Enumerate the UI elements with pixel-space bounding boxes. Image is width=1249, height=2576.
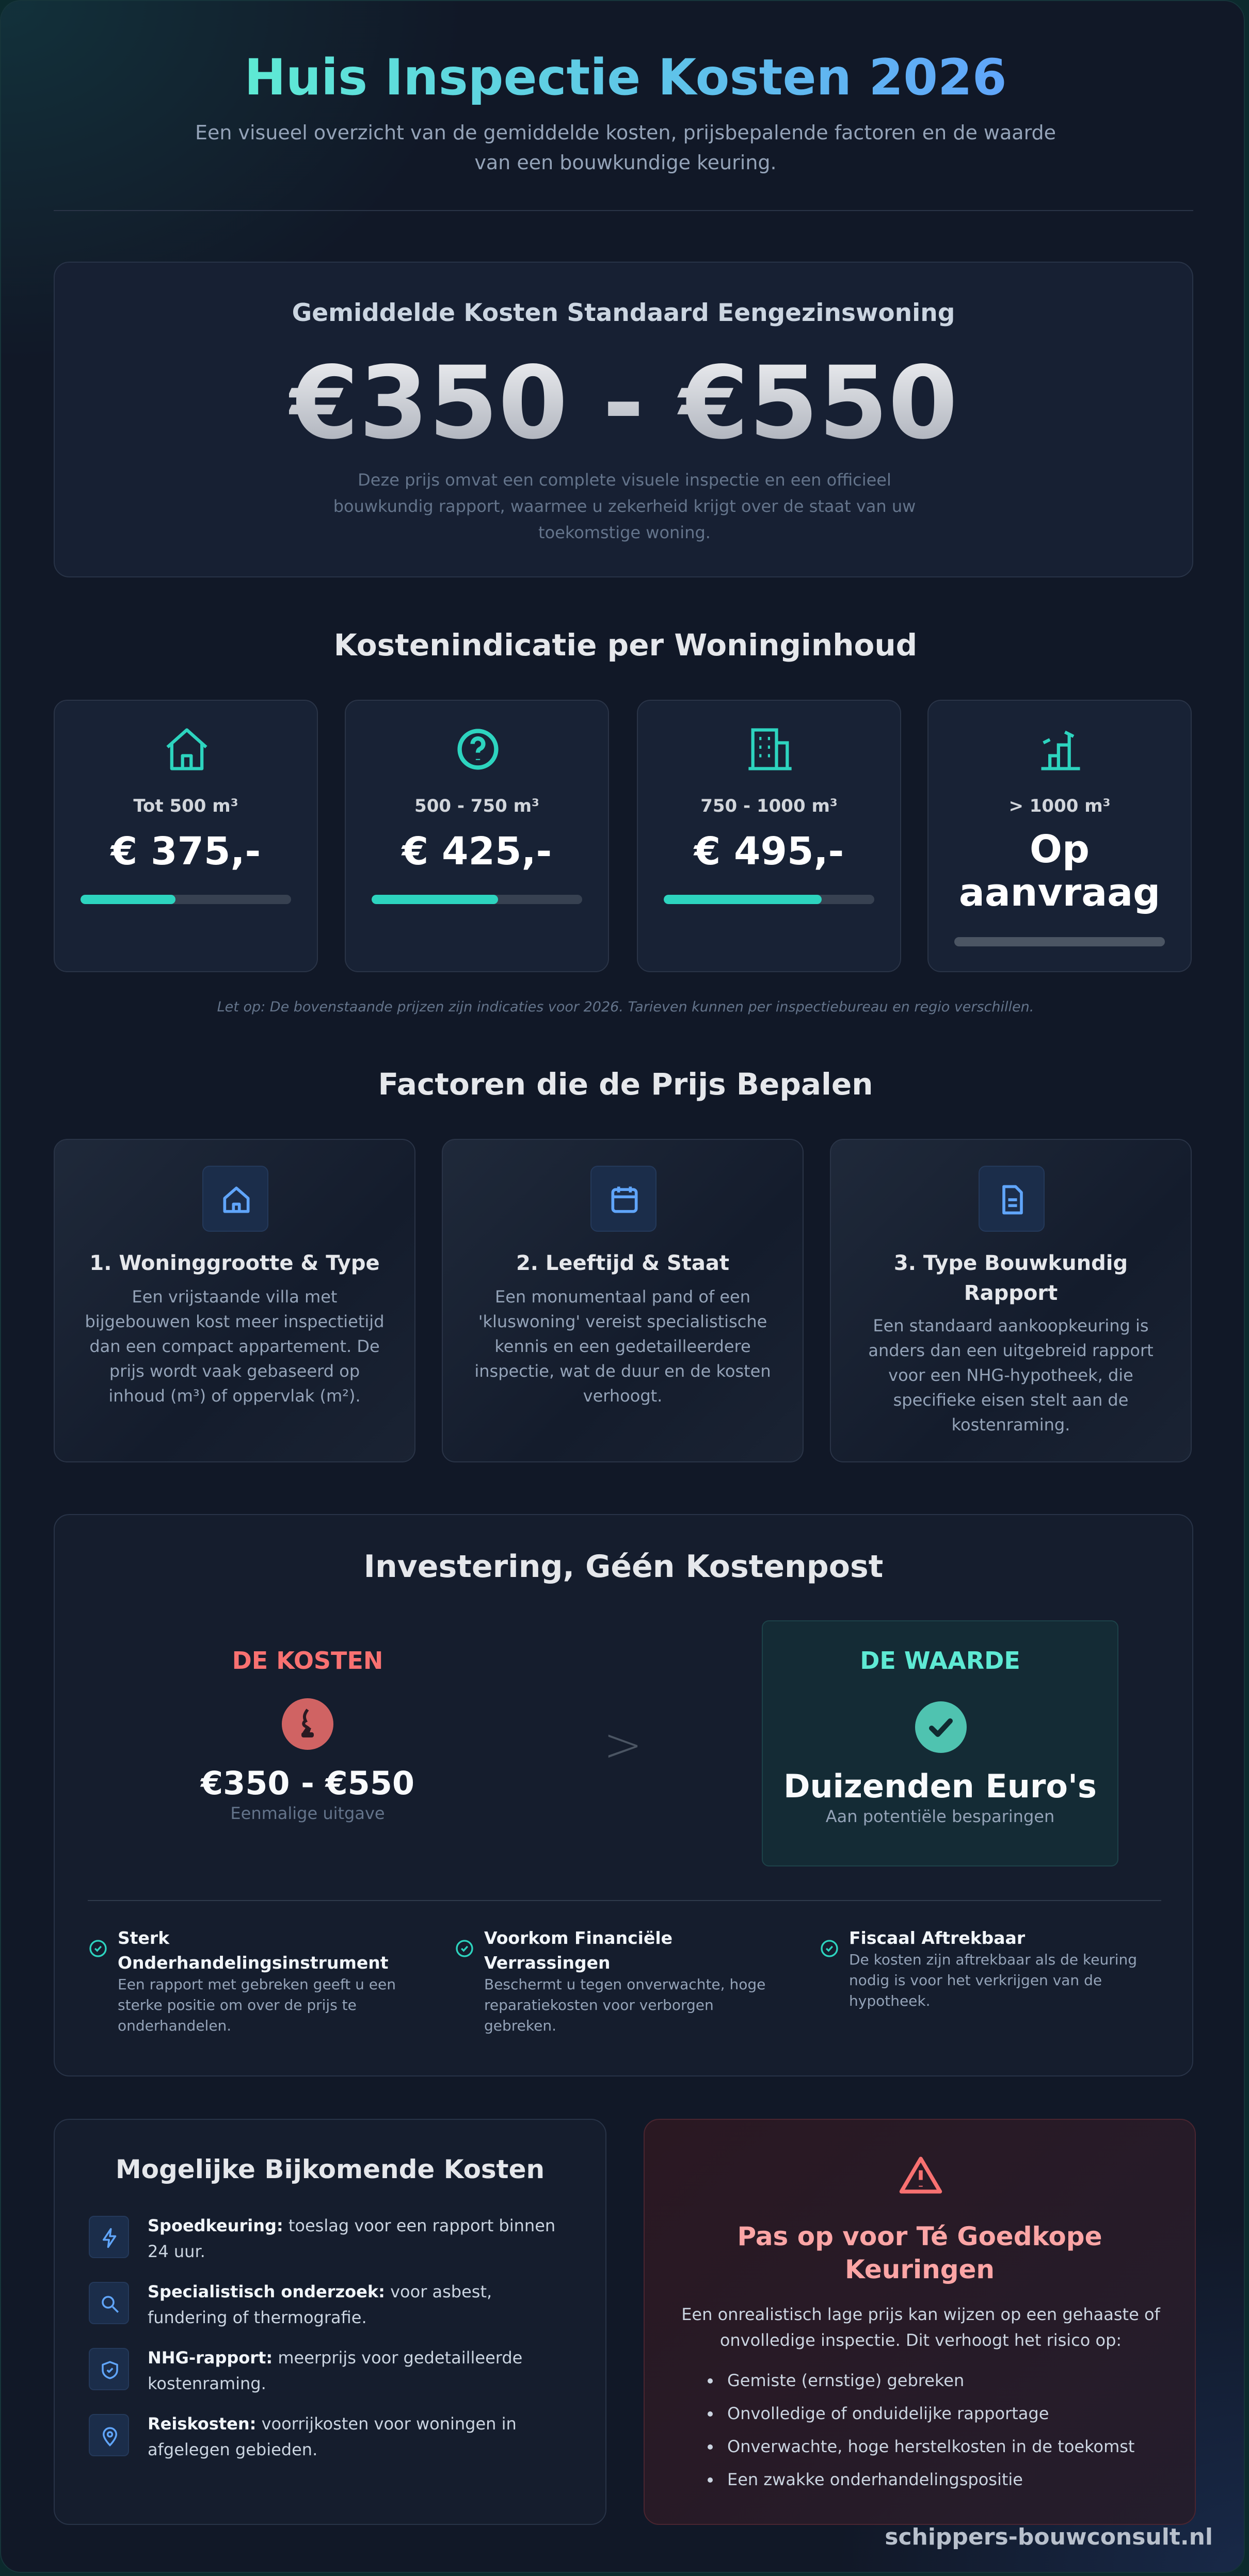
item: specialist: Specialistisch onderzoek: voor asbest, fundering of thermografie. <box>148 2282 492 2327</box>
factor 3 <box>830 1139 1192 1462</box>
text: Een rapport met gebreken geeft u een sterke positie om over de prijs te onderhandelen. <box>118 1976 396 2034</box>
card: >1000: Op <box>1030 827 1090 872</box>
benefit 2 <box>456 1928 765 2034</box>
card: tot 500: € 375,- <box>111 829 261 874</box>
heading: warning <box>738 2221 1102 2284</box>
factor 1: 1. Woninggrootte & Type <box>89 1251 380 1275</box>
card: 750-1000: € 495,- <box>694 829 844 874</box>
icon: check <box>456 1940 473 1957</box>
icon: house <box>202 1166 268 1232</box>
bullet list: Onvolledige of onduidelijke rapportage <box>727 2404 1049 2423</box>
bullet list: Een zwakke onderhandelingspositie <box>727 2470 1023 2489</box>
card: 750-1000 <box>637 700 901 972</box>
card: >1000: > 1000 m³ <box>1008 796 1111 816</box>
factor 2: Een monumentaal pand of een 'kluswoning' vereist specialistische kennis en een gedetailleerdere inspectie, wat de duur en de kosten verhoogt. <box>474 1287 771 1406</box>
icon: warning <box>899 2157 942 2194</box>
heading: warning: Keuringen <box>845 2255 995 2284</box>
heading: factors: Factoren die de Prijs Bepalen <box>378 1067 873 1102</box>
heading: warning: Pas op voor Té Goedkope <box>738 2221 1102 2251</box>
heading: per volume: Kostenindicatie per Woninginhoud <box>334 627 917 663</box>
text: Fiscaal Aftrekbaar <box>849 1928 1025 1948</box>
panel: extra costs <box>54 2119 606 2525</box>
icon: house <box>166 728 207 770</box>
icon: document <box>979 1166 1045 1232</box>
factor 1: Een vrijstaande villa met bijgebouwen kost meer inspectietijd dan een compact appartement. De prijs wordt vaak gebaseerd op inhoud (m³) of oppervlak (m²). <box>85 1287 384 1406</box>
cost column: DE KOSTEN <box>232 1647 383 1675</box>
value box: Duizenden Euro's <box>783 1767 1097 1805</box>
text: De kosten zijn aftrekbaar als de keuring nodig is voor het verkrijgen van de hypotheek. <box>849 1951 1137 2009</box>
item: NHG: NHG-rapport: meerprijs voor gedetailleerde kostenraming. <box>148 2348 522 2393</box>
icon: question <box>457 729 499 770</box>
card: tot 500 <box>54 700 318 972</box>
benefit 3 <box>821 1928 1137 2009</box>
factor 3: Een standaard aankoopkeuring is anders dan een uitgebreid rapport voor een NHG-hypotheek, die specifieke eisen stelt aan de kostenraming. <box>868 1316 1154 1435</box>
card: >1000: aanvraag <box>959 871 1160 915</box>
icon: check circle <box>915 1701 967 1753</box>
bullet list: Gemiste (ernstige) gebreken <box>727 2371 964 2390</box>
heading: average cost: Gemiddelde Kosten Standaard Eengezinswoning <box>292 299 955 327</box>
bullet list <box>708 2371 1134 2489</box>
note: Let op: De bovenstaande prijzen zijn indicaties voor 2026. Tarieven kunnen per inspectiebureau en regio verschillen. <box>217 999 1034 1015</box>
text: Sterk Onderhandelingsinstrument <box>118 1928 388 1973</box>
icon: check <box>821 1940 838 1957</box>
text: Voorkom Financiële Verrassingen <box>484 1928 672 1973</box>
icon: check <box>89 1940 107 1957</box>
card: 500-750: € 425,- <box>402 829 552 874</box>
factor 2 <box>442 1139 804 1462</box>
card: tot 500: Tot 500 m³ <box>133 796 238 816</box>
heading: investment: Investering, Géén Kostenpost <box>364 1549 883 1585</box>
icon: building <box>748 728 792 770</box>
card: 750-1000: 750 - 1000 m³ <box>700 796 838 816</box>
card: 500-750: 500 - 750 m³ <box>414 796 539 816</box>
heading: extra costs: Mogelijke Bijkomende Kosten <box>116 2154 545 2184</box>
card: >1000 <box>927 700 1192 972</box>
benefit 1 <box>89 1928 396 2034</box>
subtitle: Een visueel overzicht van de gemiddelde kosten, prijsbepalende factoren en de waarde van een bouwkundige keuring. <box>195 121 1056 174</box>
bullet list: Onverwachte, hoge herstelkosten in de toekomst <box>727 2437 1134 2456</box>
big price: €350 - €550 <box>289 345 958 461</box>
text: Beschermt u tegen onverwachte, hoge reparatiekosten voor verborgen gebreken. <box>484 1976 765 2034</box>
icon: red coin <box>282 1698 333 1750</box>
title: Huis Inspectie Kosten 2026 <box>244 49 1007 106</box>
arrow: greater than: > <box>603 1718 643 1772</box>
value box <box>762 1620 1118 1866</box>
panel: warning <box>644 2119 1196 2525</box>
icon: large property <box>1042 731 1080 770</box>
item: reis: Reiskosten: voorrijkosten voor woningen in afgelegen gebieden. <box>148 2414 517 2459</box>
card: 500-750 <box>345 700 609 972</box>
icon: calendar <box>590 1166 656 1232</box>
description: Deze prijs omvat een complete visuele inspectie en een officieel bouwkundig rapport, waarmee u zekerheid krijgt over de staat van uw toekomstige woning. <box>333 470 916 542</box>
cost column: €350 - €550 <box>201 1764 414 1802</box>
factor 1 <box>54 1139 415 1462</box>
warning text: Een onrealistisch lage prijs kan wijzen op een gehaaste of onvolledige inspectie. Dit verhoogt het risico op: <box>681 2305 1160 2350</box>
item: spoed: Spoedkeuring: toeslag voor een rapport binnen 24 uur. <box>148 2216 555 2261</box>
value box: DE WAARDE <box>860 1647 1020 1675</box>
footer url: schippers-bouwconsult.nl <box>885 2524 1213 2550</box>
factor 2: 2. Leeftijd & Staat <box>516 1251 729 1275</box>
cost column <box>200 1647 414 1823</box>
panel: average cost <box>54 262 1193 577</box>
factor 3: 3. Type Bouwkundig Rapport <box>894 1251 1128 1305</box>
panel: investment <box>54 1514 1193 2076</box>
cost column: Eenmalige uitgave <box>230 1804 385 1823</box>
value box: Aan potentiële besparingen <box>826 1807 1054 1826</box>
